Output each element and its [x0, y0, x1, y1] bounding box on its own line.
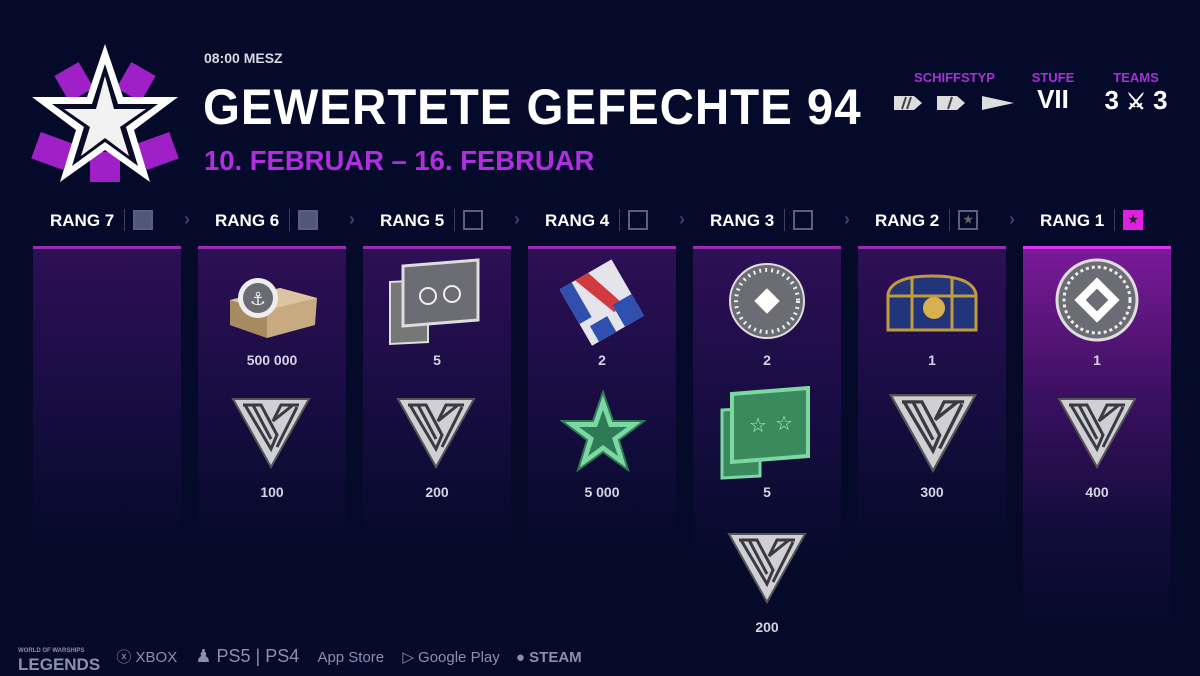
text: 200 rang 3: 200 — [755, 619, 779, 635]
text: 5 rang 3: 5 — [763, 484, 771, 500]
rank headers: ★ — [1128, 214, 1138, 226]
icon: V rang 5 — [396, 398, 476, 469]
text: 100: 100 — [260, 484, 284, 500]
info: tier: STUFE — [1032, 70, 1074, 85]
rank headers: RANG 1 — [1040, 211, 1104, 230]
rank headers: › — [679, 209, 685, 229]
time label: 08:00 MESZ — [204, 50, 283, 66]
panel: rang 1 — [1023, 246, 1171, 621]
icon: V rang 2 — [889, 394, 977, 473]
icon: flags rang 5 — [389, 258, 480, 345]
text: 200: 200 — [425, 484, 449, 500]
rank headers: › — [349, 209, 355, 229]
info: tier — [1032, 70, 1074, 114]
rank headers: RANG 2 — [875, 211, 939, 230]
rank headers: RANG 5 — [380, 211, 444, 230]
icon: crate — [230, 278, 317, 338]
rank headers: › — [1009, 209, 1015, 229]
text: 5: 5 — [433, 352, 441, 368]
info: ship type: SCHIFFSTYP — [914, 70, 995, 85]
icon: emblem ring — [729, 263, 805, 339]
info: tier: VII — [1037, 84, 1069, 114]
icon: V rang 6 — [231, 398, 311, 469]
rank headers: › — [514, 209, 520, 229]
panel: rang 5 — [363, 246, 511, 546]
rank headers: › — [844, 209, 850, 229]
panel: rang 4 — [528, 246, 676, 546]
text: 400: 400 — [1085, 484, 1109, 500]
text: 2 rang 3: 2 — [763, 352, 771, 368]
icon: chest — [886, 274, 978, 332]
panel: rang 3 — [693, 246, 841, 646]
icon: crate: ⚓ — [250, 289, 266, 310]
rank headers: RANG 6 — [215, 211, 279, 230]
text: 5 000: 5 000 — [584, 484, 620, 500]
title: GEWERTETE GEFECHTE 94 — [203, 79, 862, 135]
rank headers: RANG 3 — [710, 211, 774, 230]
icon: V rang 1 — [1057, 398, 1137, 469]
text: 300: 300 — [920, 484, 944, 500]
icon: green flags: ☆ — [749, 413, 767, 437]
panel: rang 6 — [198, 246, 346, 546]
icon: laurel emblem — [1056, 258, 1138, 342]
info: ship type — [894, 70, 1014, 110]
logo: star emblem — [31, 44, 179, 182]
footer: platform logos — [18, 646, 582, 674]
rank headers: RANG 4 — [545, 211, 609, 230]
text: 1 rang 2: 1 — [928, 352, 936, 368]
footer: platform logos: WORLD OF WARSHIPS — [18, 648, 84, 654]
icon: camouflage — [560, 259, 644, 346]
rank headers: RANG 7 — [50, 211, 114, 230]
panel: rang 2 — [858, 246, 1006, 546]
icon: green flags — [720, 386, 810, 480]
icon: green flags: ☆ — [775, 411, 793, 435]
date: 10. FEBRUAR – 16. FEBRUAR — [204, 145, 594, 176]
rank headers: ★ — [963, 214, 973, 226]
rank headers: › — [184, 209, 190, 229]
footer: platform logos: ⓧ XBOX ♟ PS5 | PS4 App Store ▷ Google Play ● STEAM — [116, 646, 582, 666]
icon: V rang 3 second — [727, 533, 807, 604]
panel: rang 7 — [33, 246, 181, 546]
info: teams: 3 ⚔ 3 — [1104, 85, 1168, 115]
footer: platform logos: LEGENDS — [18, 655, 100, 674]
rank headers — [50, 209, 1143, 231]
info: teams — [1104, 70, 1168, 115]
text: 2: 2 — [598, 352, 606, 368]
icon: green star — [560, 390, 646, 472]
text: 500 000: 500 000 — [247, 352, 297, 368]
info: teams: TEAMS — [1113, 70, 1159, 85]
text: 1 rang 1: 1 — [1093, 352, 1101, 368]
